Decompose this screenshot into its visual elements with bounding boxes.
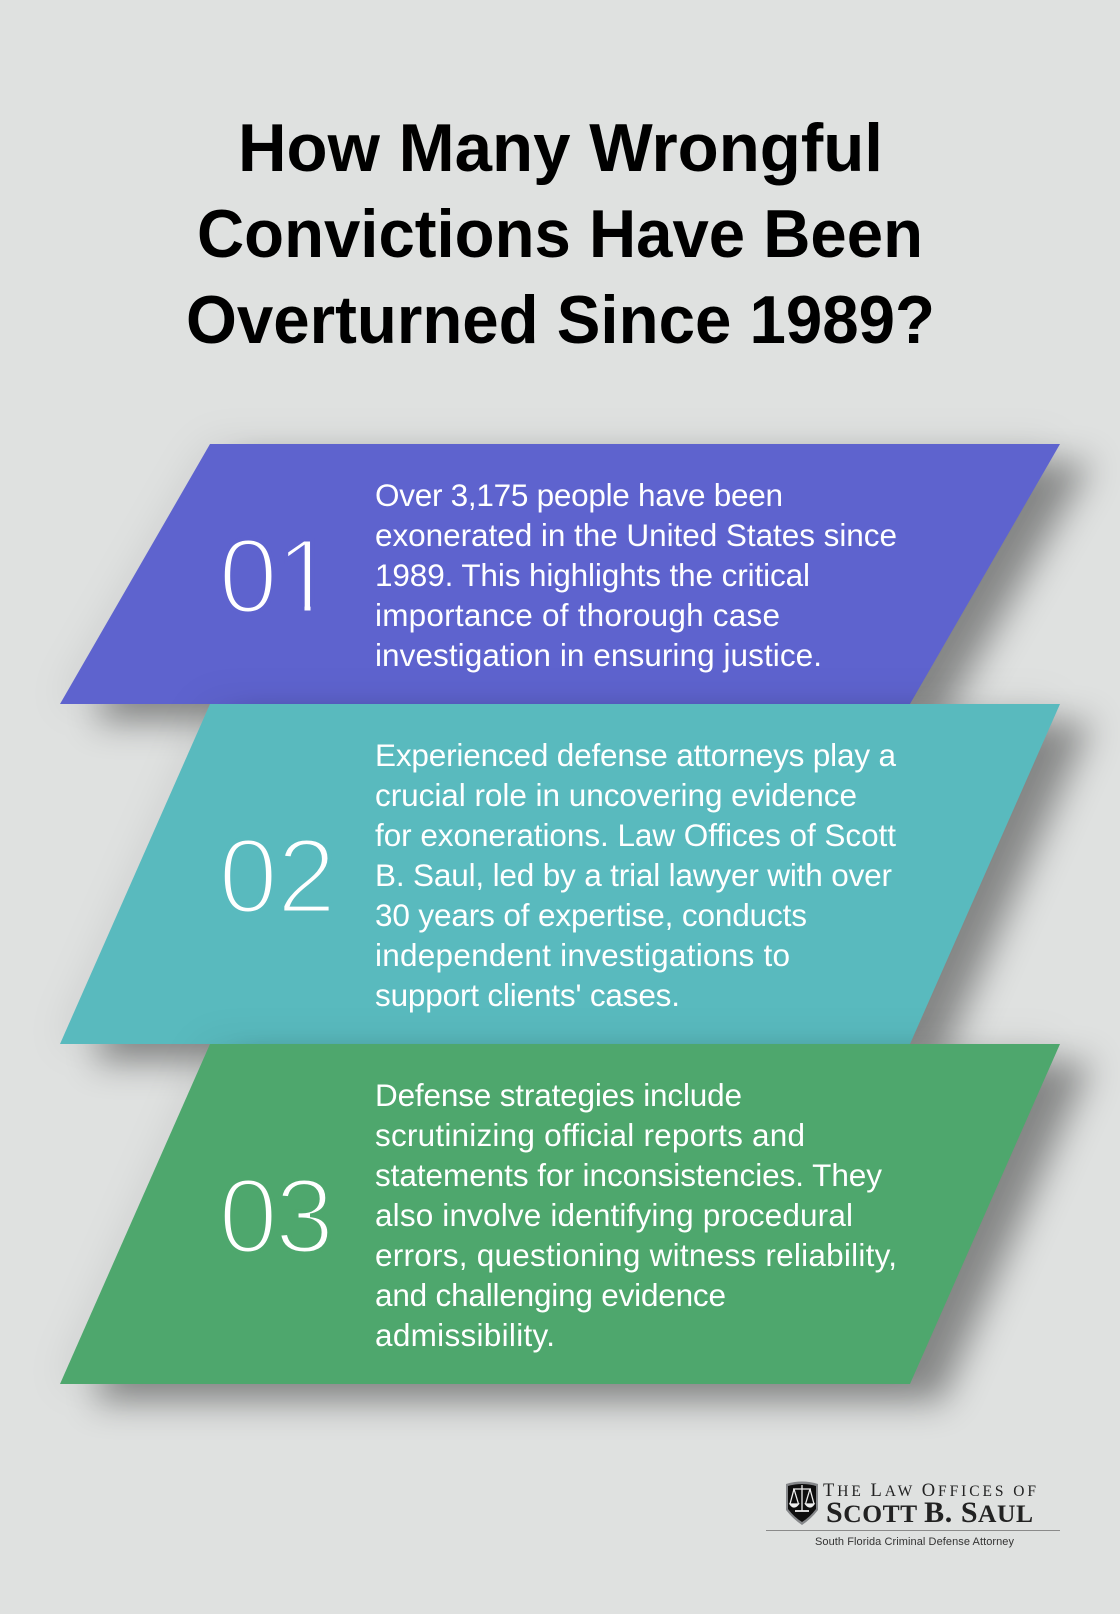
- icon: scales of justice shield: [786, 1482, 818, 1525]
- shape: panel 02 background: [60, 704, 1060, 1044]
- text: step 03 description: also involve identifying procedural: [375, 1197, 853, 1233]
- title: [186, 110, 935, 358]
- text: step 01 description: 1989. This highlights the critical: [375, 557, 810, 593]
- text: step 03 description: [375, 1077, 897, 1353]
- panel: step 03: [60, 1044, 1060, 1384]
- number 01: 01: [219, 518, 335, 636]
- text: step 03 description: and challenging evidence: [375, 1277, 726, 1313]
- text: step 02 description: Experienced defense attorneys play a: [375, 737, 896, 773]
- text: scott b. saul: SCOTT B. SAUL: [826, 1496, 1033, 1529]
- divider line: [766, 1530, 1060, 1531]
- number 02: 02: [219, 818, 336, 936]
- text: step 01 description: [375, 477, 897, 673]
- text: step 03 description: scrutinizing official reports and: [375, 1117, 805, 1153]
- panel: step 02: [60, 704, 1060, 1044]
- title: Convictions Have Been: [197, 196, 923, 272]
- shape: panel 01 background: [60, 444, 1060, 704]
- number 03: 03: [219, 1158, 334, 1276]
- text: step 03 description: admissibility.: [375, 1317, 555, 1353]
- text: step 01 description: exonerated in the United States since: [375, 517, 897, 553]
- shape: panel 03 background: [60, 1044, 1060, 1384]
- text: step 03 description: statements for inconsistencies. They: [375, 1157, 882, 1193]
- text: the law offices of: THE LAW OFFICES OF: [823, 1481, 1036, 1501]
- text: tagline: South Florida Criminal Defense Attorney: [815, 1536, 1014, 1548]
- title: Overturned Since 1989?: [186, 282, 935, 358]
- text: step 03 description: Defense strategies include: [375, 1077, 742, 1113]
- text: step 02 description: B. Saul, led by a trial lawyer with over: [375, 857, 892, 893]
- panel: step 01: [60, 444, 1060, 704]
- text: step 02 description: support clients' cases.: [375, 977, 680, 1013]
- title: How Many Wrongful: [238, 110, 883, 186]
- text: step 02 description: [375, 737, 896, 1013]
- logo: The Law Offices of Scott B. Saul: [766, 1481, 1060, 1548]
- text: step 02 description: 30 years of expertise, conducts: [375, 897, 807, 933]
- text: step 03 description: errors, questioning witness reliability,: [375, 1237, 897, 1273]
- text: step 01 description: importance of thorough case: [375, 597, 780, 633]
- text: step 01 description: investigation in ensuring justice.: [375, 637, 822, 673]
- text: step 01 description: Over 3,175 people have been: [375, 477, 783, 513]
- text: step 02 description: crucial role in uncovering evidence: [375, 777, 857, 813]
- text: step 02 description: independent investigations to: [375, 937, 790, 973]
- text: step 02 description: for exonerations. Law Offices of Scott: [375, 817, 896, 853]
